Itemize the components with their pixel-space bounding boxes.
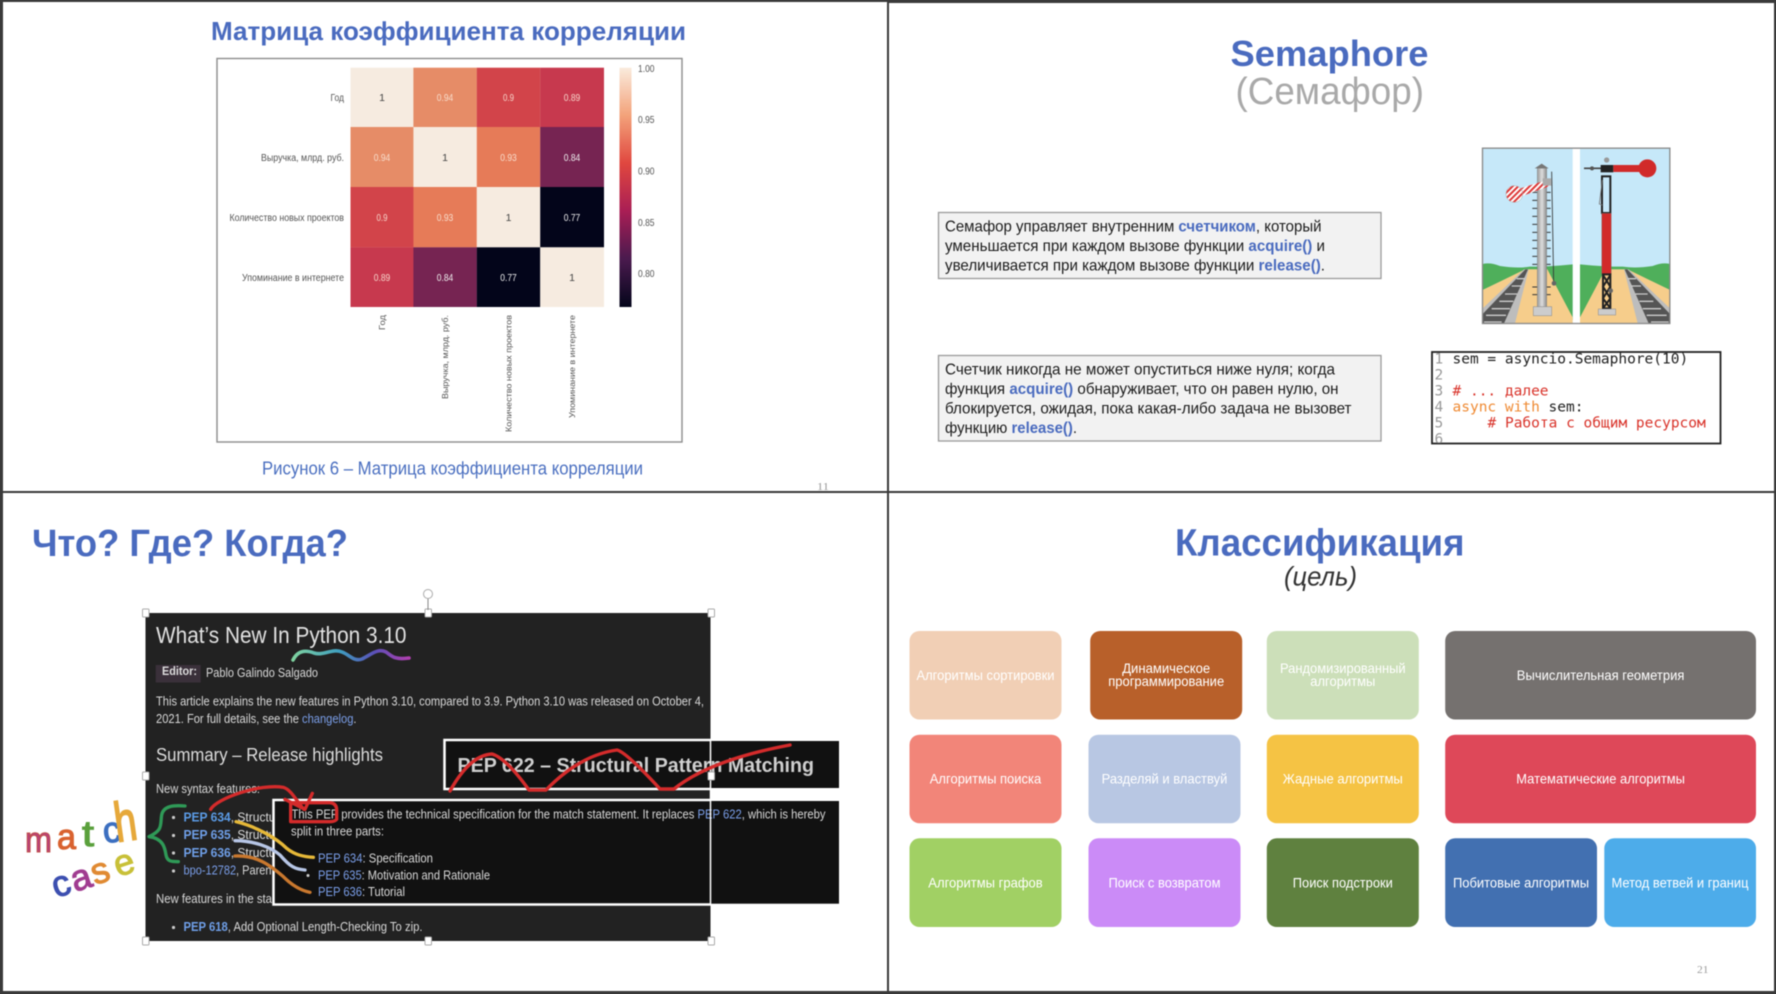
page number 21: 21 [1697, 965, 1708, 976]
text box: blocking behaviour: функция acquire() обнаруживает, что он равен нулю, он [945, 381, 1338, 398]
chart: correlation heatmap: 0.9 [376, 212, 388, 224]
subtitle: semaphore in Russian: (Семафор) [1236, 71, 1424, 113]
tile: graph algorithms: Алгоритмы графов [928, 874, 1043, 890]
overlay: PEP description: PEP 635: Motivation and Rationale [318, 868, 490, 882]
title: what where when: Что? Где? Когда? [32, 523, 348, 565]
text box: counter description: уменьшается при каждом вызове функции acquire() и [945, 238, 1325, 255]
tile: dynamic programming [1090, 631, 1242, 720]
handwritten words: match case: a [65, 854, 97, 900]
squiggle under heading [293, 651, 409, 660]
panel: classification slide [889, 493, 1774, 991]
handwritten words: match case: e [108, 839, 140, 885]
chart: correlation heatmap: 0.93 [437, 212, 453, 224]
code block: asyncio semaphore: sem = asyncio.Semaphore(10) [1452, 352, 1688, 368]
chart: correlation heatmap: Количество новых проектов [504, 314, 514, 432]
chart: correlation heatmap: Количество новых проектов [230, 213, 344, 224]
screenshot: what's new in python 3.10: New syntax features: [156, 782, 260, 796]
chart: correlation heatmap: 1 [442, 152, 448, 164]
handwritten words: match case: c [46, 861, 76, 906]
tile: sorting algorithms [910, 631, 1062, 720]
chart: correlation heatmap: 0.9 [503, 92, 514, 104]
tile: bitwise algorithms: Побитовые алгоритмы [1453, 874, 1589, 890]
tile: search algorithms: Алгоритмы поиска [930, 770, 1041, 786]
chart: correlation heatmap: 1.00 [638, 63, 655, 75]
text box: blocking behaviour [938, 356, 1381, 441]
tile: divide and conquer [1088, 735, 1240, 823]
chart: correlation heatmap: 0.84 [564, 152, 580, 164]
tile: search algorithms [910, 735, 1062, 823]
code block: asyncio semaphore: 5 [1434, 416, 1443, 432]
chart: correlation heatmap: 0.85 [638, 217, 655, 229]
tile: randomized algorithms: алгоритмы [1310, 673, 1375, 689]
overlay: PEP description: split in three parts: [291, 824, 384, 838]
tile: mathematical algorithms: Математические алгоритмы [1516, 770, 1685, 786]
page number 11: 11 [817, 482, 829, 493]
code block: asyncio semaphore: # Работа с общим ресурсом [1488, 416, 1706, 432]
tile: branch and bound [1604, 838, 1756, 927]
red scribble across PEP 622 heading [450, 745, 790, 791]
chart: correlation heatmap: Выручка, млрд. руб. [440, 315, 450, 399]
chart: correlation heatmap: Выручка, млрд. руб. [261, 152, 344, 164]
text box: blocking behaviour: функцию release(). [945, 420, 1077, 437]
screenshot: what's new in python 3.10: PEP 636, Structu [184, 846, 276, 860]
code block: asyncio semaphore: async with sem: [1452, 400, 1583, 416]
tile: computational geometry: Вычислительная геометрия [1517, 667, 1684, 683]
illustration: railway semaphore signals [1482, 148, 1670, 323]
overlay: PEP description: PEP 636: Tutorial [318, 885, 405, 899]
tile: randomized algorithms [1267, 631, 1419, 720]
overlay: PEP 622 heading [444, 740, 839, 789]
chart: correlation heatmap: 0.94 [437, 92, 453, 104]
overlay: PEP description: This PEP provides the technical specification for the match statement. It replaces PEP 622, which is hereby [292, 808, 826, 822]
text box: blocking behaviour: блокируется, ожидая, пока какая-либо задача не вызовет [945, 400, 1352, 418]
tile: dynamic programming: Динамическое [1122, 660, 1210, 676]
handwritten words: match case [25, 790, 141, 906]
tile: substring search [1267, 838, 1419, 927]
text box: blocking behaviour: Счетчик никогда не может опуститься ниже нуля; когда [945, 362, 1335, 378]
code block: asyncio semaphore: 2 [1434, 368, 1443, 384]
chart: correlation heatmap: 0.77 [564, 212, 580, 224]
red arrow to highlighted words [211, 787, 337, 822]
handwritten words: match case: a [57, 817, 76, 857]
handwritten words: match case: m [25, 820, 52, 860]
chart: correlation heatmap: 0.80 [638, 268, 655, 280]
chart: correlation heatmap: 0.93 [500, 152, 517, 164]
handwritten words: match case: t [82, 814, 94, 854]
chart: correlation heatmap: 0.77 [500, 272, 517, 284]
chart: correlation heatmap: Год [377, 315, 387, 330]
screenshot: what's new in python 3.10 [146, 613, 710, 941]
chart: correlation heatmap [217, 58, 682, 442]
screenshot: what's new in python 3.10: 2021. For full details, see the changelog. [156, 712, 356, 726]
handwritten words: match case: h [110, 790, 141, 855]
panel: python 3.10 slide [3, 493, 887, 991]
title: correlation matrix: Матрица коэффициента корреляции [211, 16, 686, 46]
tile: divide and conquer: Разделяй и властвуй [1102, 770, 1227, 786]
title: Semaphore: Semaphore [1230, 33, 1428, 74]
screenshot: what's new in python 3.10: Editor: [162, 664, 197, 678]
screenshot: what's new in python 3.10: bpo-12782, Paren [184, 864, 272, 878]
chart: correlation heatmap: Упоминание в интернете [567, 315, 577, 418]
code block: asyncio semaphore: 6 [1434, 432, 1443, 448]
chart: correlation heatmap: 0.95 [638, 114, 655, 126]
tile: mathematical algorithms [1445, 735, 1756, 823]
chart: correlation heatmap: 0.89 [374, 272, 390, 284]
panel: semaphore slide [889, 3, 1774, 491]
tile: branch and bound: Метод ветвей и границ [1612, 874, 1748, 890]
tile: bitwise algorithms [1445, 838, 1597, 927]
chart: correlation heatmap: 0.90 [638, 166, 655, 178]
chart: correlation heatmap: 0.89 [564, 92, 580, 104]
text box: counter description: увеличивается при каждом вызове функции release(). [945, 258, 1325, 274]
chart: correlation heatmap: 1 [569, 272, 575, 284]
tile: dynamic programming: программирование [1108, 673, 1224, 689]
code block: asyncio semaphore [1432, 352, 1720, 448]
tile: sorting algorithms: Алгоритмы сортировки [916, 667, 1054, 683]
selection handles [142, 590, 714, 945]
screenshot: what's new in python 3.10: New features in the sta [156, 892, 272, 906]
chart: correlation heatmap: 0.84 [437, 272, 453, 284]
chart: correlation heatmap: Год [330, 93, 344, 104]
subtitle: goal: (цель) [1284, 562, 1357, 592]
marker strokes: brace and links between PEPs [149, 806, 313, 892]
overlay: PEP 622 heading: PEP 622 – Structural Pattern Matching [458, 755, 814, 777]
panel: correlation matrix slide [3, 2, 887, 493]
handwritten words: match case: c [101, 808, 123, 851]
tile: greedy algorithms: Жадные алгоритмы [1283, 770, 1403, 786]
screenshot: what's new in python 3.10: PEP 635, Structu [184, 828, 276, 842]
screenshot: what's new in python 3.10: Summary – Release highlights [156, 744, 383, 765]
tile: randomized algorithms: Рандомизированный [1280, 660, 1406, 676]
screenshot: what's new in python 3.10: Pablo Galindo Salgado [206, 666, 318, 680]
screenshot: what's new in python 3.10: This article explains the new features in Python 3.10, compared to 3.9. Python 3.10 was released on October 4, [156, 694, 704, 708]
chart: correlation heatmap: 0.94 [374, 152, 390, 164]
screenshot: what's new in python 3.10: PEP 618, Add Optional Length-Checking To zip. [184, 920, 422, 934]
tile: backtracking [1088, 838, 1240, 927]
code block: asyncio semaphore: # ... далее [1452, 384, 1549, 400]
overlay: PEP description [274, 800, 839, 904]
code block: asyncio semaphore: 3 [1434, 384, 1443, 400]
overlay: PEP description: PEP 634: Specification [318, 852, 433, 866]
screenshot: what's new in python 3.10: PEP 634, Structu [184, 810, 276, 824]
handwritten words: match case: s [85, 848, 115, 893]
tile: computational geometry [1445, 631, 1756, 720]
chart: correlation heatmap: 1 [506, 212, 512, 224]
chart: correlation heatmap: Упоминание в интернете [242, 273, 344, 284]
title: classification: Классификация [1175, 522, 1464, 564]
figure caption: Рисунок 6 – Матрица коэффициента корреляции [262, 458, 643, 478]
tile: backtracking: Поиск с возвратом [1108, 874, 1220, 890]
tile: graph algorithms [910, 838, 1062, 927]
text box: counter description: Семафор управляет внутренним счетчиком, который [945, 218, 1322, 236]
screenshot: what's new in python 3.10: What’s New In Python 3.10 [156, 622, 406, 648]
tile: substring search: Поиск подстроки [1293, 874, 1393, 890]
text box: counter description [938, 212, 1381, 278]
code block: asyncio semaphore: 4 [1434, 400, 1444, 416]
chart: correlation heatmap: 1 [379, 92, 385, 104]
code block: asyncio semaphore: 1 [1434, 352, 1443, 368]
white edge of overlays [710, 740, 712, 905]
tile: greedy algorithms [1267, 735, 1419, 823]
